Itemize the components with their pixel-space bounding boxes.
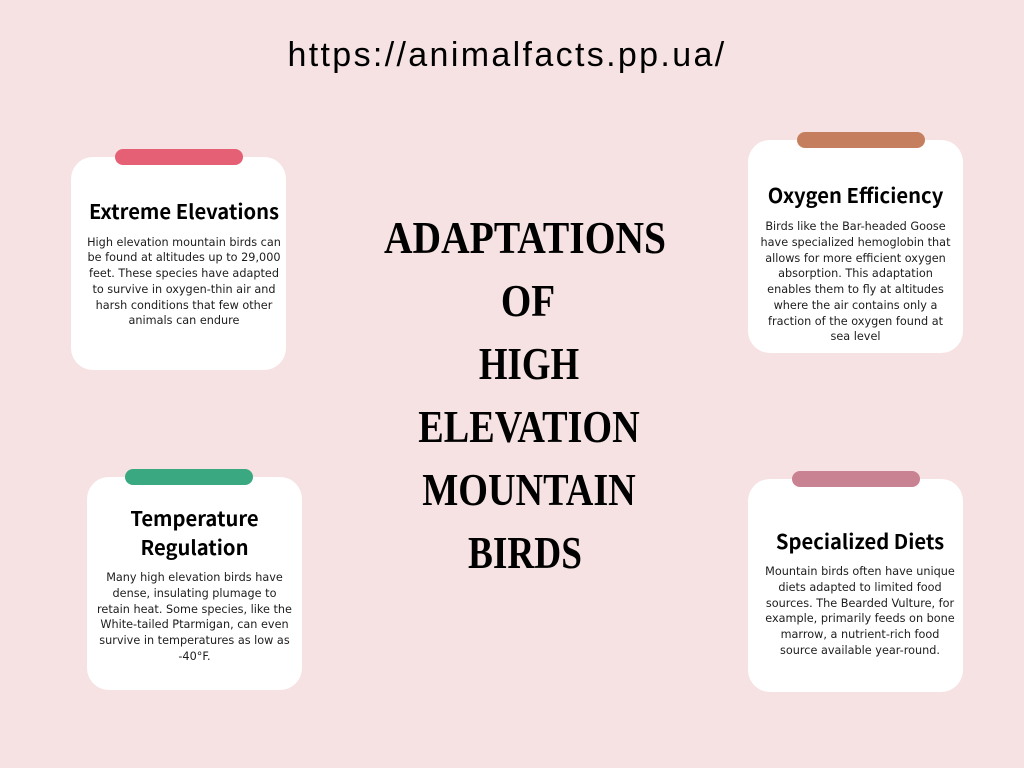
text: specialized diets: Mountain birds often have unique bbox=[765, 565, 955, 578]
panel: temperature regulation bbox=[87, 477, 302, 690]
tab: extreme elevations bbox=[115, 149, 243, 165]
text: temperature regulation: White-tailed Ptarmigan, can even bbox=[100, 618, 289, 631]
text: temperature regulation: -40°F. bbox=[178, 650, 211, 663]
text: oxygen efficiency: enables them to fly at altitudes bbox=[767, 283, 944, 296]
heading: temperature regulation bbox=[130, 503, 259, 561]
text: oxygen efficiency bbox=[761, 220, 950, 343]
website url heading: https://animalfacts.pp.ua/ bbox=[287, 36, 727, 74]
text: temperature regulation bbox=[97, 571, 292, 663]
tab: specialized diets bbox=[792, 471, 920, 487]
text: specialized diets: example, primarily feeds on bone bbox=[765, 612, 955, 625]
text: specialized diets: source available year-round. bbox=[780, 644, 940, 657]
text: oxygen efficiency: fraction of the oxygen found at bbox=[768, 314, 943, 328]
text: temperature regulation: Many high elevation birds have bbox=[106, 571, 283, 584]
text: specialized diets: marrow, a nutrient-rich food bbox=[781, 628, 939, 641]
main title: ELEVATION bbox=[418, 401, 639, 452]
text: extreme elevations: be found at altitudes up to 29,000 bbox=[87, 251, 281, 264]
heading: temperature regulation: Temperature bbox=[130, 503, 259, 532]
text: extreme elevations: animals can endure bbox=[128, 314, 239, 327]
text: oxygen efficiency: absorption. This adaptation bbox=[778, 267, 933, 280]
text: extreme elevations: feet. These species have adapted bbox=[89, 267, 279, 280]
panel: oxygen efficiency bbox=[748, 140, 963, 353]
text: temperature regulation: dense, insulating plumage to bbox=[113, 587, 276, 600]
tab: temperature regulation bbox=[125, 469, 253, 485]
text: specialized diets: sources. The Bearded Vulture, for bbox=[766, 596, 954, 610]
text: oxygen efficiency: Birds like the Bar-headed Goose bbox=[765, 220, 946, 233]
text: temperature regulation: retain heat. Some species, like the bbox=[97, 602, 292, 616]
heading: specialized diets: Specialized Diets bbox=[776, 526, 944, 555]
panel: extreme elevations bbox=[71, 157, 286, 370]
main title: OF bbox=[501, 275, 555, 326]
main title: MOUNTAIN bbox=[422, 464, 635, 515]
text: extreme elevations: High elevation mountain birds can bbox=[87, 236, 281, 248]
heading: extreme elevations: Extreme Elevations bbox=[89, 196, 279, 225]
main title: ADAPTATIONS bbox=[384, 212, 666, 263]
main title bbox=[384, 212, 666, 578]
text: extreme elevations bbox=[87, 236, 281, 327]
text: oxygen efficiency: have specialized hemoglobin that bbox=[761, 236, 950, 249]
text: oxygen efficiency: allows for more efficient oxygen bbox=[765, 252, 946, 264]
text: temperature regulation: survive in temperatures as low as bbox=[99, 634, 290, 647]
main title: BIRDS bbox=[468, 527, 582, 578]
heading: temperature regulation: Regulation bbox=[140, 532, 249, 561]
text: specialized diets bbox=[765, 565, 955, 657]
text: oxygen efficiency: sea level bbox=[830, 330, 880, 343]
text: extreme elevations: to survive in oxygen-thin air and bbox=[92, 283, 276, 296]
text: oxygen efficiency: where the air contains only a bbox=[774, 299, 937, 312]
text: specialized diets: diets adapted to limited food bbox=[778, 581, 942, 594]
panel: specialized diets bbox=[748, 479, 963, 692]
heading: oxygen efficiency: Oxygen Efficiency bbox=[768, 180, 943, 209]
tab: oxygen efficiency bbox=[797, 132, 925, 148]
text: extreme elevations: harsh conditions that few other bbox=[96, 298, 272, 312]
main title: HIGH bbox=[479, 338, 579, 389]
